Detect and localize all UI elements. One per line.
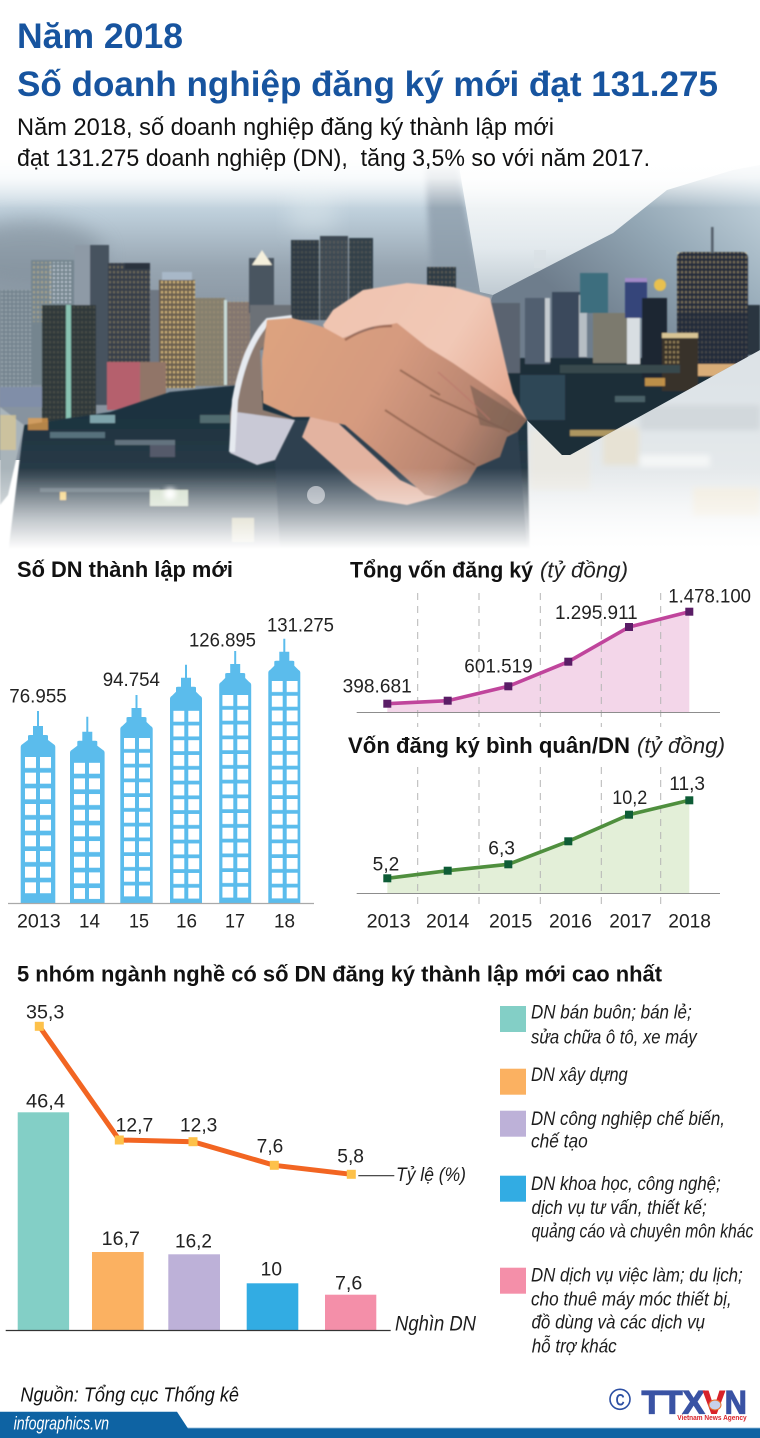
photo: lower hand and wrist <box>262 318 527 497</box>
value labels: capital: 1.478.100 <box>668 587 751 608</box>
tower year labels: 14 <box>79 912 100 933</box>
value labels: share: 35,3 <box>26 1002 64 1023</box>
windows 2014 <box>74 763 100 899</box>
tower 2015 <box>120 695 153 903</box>
value labels: capital: 398.681 <box>343 677 412 698</box>
label: bar series: Nghìn DN <box>395 1313 477 1336</box>
legend item: construction <box>500 1065 628 1095</box>
heading: average capital per enterprise: (tỷ đồng) <box>637 733 725 758</box>
value labels: average capital: 11,3 <box>669 774 705 795</box>
bars: thousand enterprises <box>18 1112 376 1330</box>
windows 2017 <box>222 695 248 898</box>
markers: share points <box>35 1022 356 1179</box>
intro text block: Năm 2018, số doanh nghiệp đăng ký thành lập mới <box>17 114 554 141</box>
title: Số doanh nghiệp đăng ký mới đạt 131.275 <box>17 65 718 104</box>
tower 2017 <box>219 651 251 903</box>
legend item: employment and tourism services <box>500 1266 743 1358</box>
value labels: bars: 46,4 <box>26 1092 65 1113</box>
heading: top 5 industry groups: 5 nhóm ngành nghề có số DN đăng ký thành lập mới cao nhất <box>17 962 663 987</box>
chart: skyscraper bars of new enterprises <box>8 616 334 933</box>
legend item: manufacturing: DN công nghiệp chế biến, <box>531 1109 725 1130</box>
tower 2014 <box>70 717 105 903</box>
photo: suit and sky backdrop <box>0 168 760 518</box>
footer banner <box>0 1412 760 1438</box>
photo: upper palm and thumb <box>323 283 527 432</box>
photo: right arm sleeve with skyline <box>480 160 760 460</box>
wordmark: N <box>725 1384 747 1420</box>
area chart: total registered capital <box>343 587 751 727</box>
photo: shirt cuff <box>230 317 295 465</box>
legend item: science and technology: DN khoa học, công nghệ; <box>531 1174 721 1195</box>
value labels: average capital: 5,2 <box>373 855 399 876</box>
tower year labels: 16 <box>176 912 197 933</box>
legend item: employment and tourism services: cho thuê máy móc thiết bị, <box>531 1290 732 1311</box>
heading: average capital per enterprise: Vốn đăng ký bình quân/DN <box>348 733 630 758</box>
year labels: 2015 <box>489 912 532 933</box>
footer site name: infographics.vn <box>14 1413 109 1433</box>
legend item: wholesale and retail: DN bán buôn; bán lẻ; <box>531 1002 692 1023</box>
tower value labels: 76.955 <box>9 687 67 708</box>
value labels: share <box>26 1002 364 1168</box>
year labels: 2013 <box>367 912 411 933</box>
value labels: average capital: 6,3 <box>488 838 515 859</box>
photo: clasped hands <box>262 283 527 505</box>
wordmark: TTX <box>642 1384 705 1420</box>
markers: capital points <box>383 608 693 708</box>
tower value labels: 94.754 <box>103 670 160 691</box>
line: average capital trend <box>387 800 689 878</box>
year labels: 2016 <box>549 912 592 933</box>
value labels: capital: 1.295.911 <box>555 603 638 624</box>
copyright symbol: C <box>616 1390 625 1410</box>
tower year labels: 2013 <box>17 912 61 933</box>
photo: jacket button <box>307 486 325 504</box>
wordmark: V <box>703 1384 726 1420</box>
year labels: 2018 <box>668 912 711 933</box>
value labels: bars: 16,2 <box>175 1231 212 1252</box>
value labels: capital: 601.519 <box>464 657 533 678</box>
source note: Nguồn: Tổng cục Thống kê <box>20 1385 239 1407</box>
tower year labels: 17 <box>225 912 245 933</box>
tower 2013 <box>21 711 55 903</box>
tower year labels: 18 <box>274 912 295 933</box>
value labels: share: 12,7 <box>116 1116 153 1137</box>
logo: TTXVN <box>610 1384 747 1422</box>
value labels: bars: 7,6 <box>335 1273 362 1294</box>
legend item: employment and tourism services: hỗ trợ khác <box>532 1337 617 1358</box>
tower value labels: 126.895 <box>189 631 256 652</box>
photo: handshake over city skyline <box>0 158 760 570</box>
photo: bottom fade <box>0 468 760 558</box>
combo chart: industry groups <box>6 1002 477 1336</box>
heading: total registered capital: (tỷ đồng) <box>540 558 628 583</box>
value labels: bars <box>26 1092 362 1294</box>
photo: suit lower dark region behind hands <box>276 420 525 534</box>
heading: total registered capital: Tổng vốn đăng ký <box>350 558 534 583</box>
value labels: share: 12,3 <box>180 1116 217 1137</box>
legend item: manufacturing <box>500 1109 725 1153</box>
line: share percent <box>39 1026 351 1174</box>
legend item: manufacturing: chế tạo <box>531 1132 588 1153</box>
line: capital trend <box>387 612 689 704</box>
value labels: capital <box>343 587 751 698</box>
tower year labels <box>17 912 295 933</box>
heading: total registered capital <box>350 558 628 583</box>
value labels: average capital: 10,2 <box>612 788 647 809</box>
legend item: wholesale and retail <box>500 1002 698 1048</box>
legend item: construction: DN xây dựng <box>531 1065 628 1086</box>
intro text block: đạt 131.275 doanh nghiệp (DN), tăng 3,5% so với năm 2017. <box>17 145 650 172</box>
value labels: bars: 16,7 <box>102 1229 140 1250</box>
photo: top fade <box>0 158 760 208</box>
value labels: share: 7,6 <box>257 1136 283 1157</box>
year labels: 2017 <box>609 912 652 933</box>
year labels: 2014 <box>426 912 470 933</box>
photo: under fingers <box>302 417 437 505</box>
title <box>17 17 718 104</box>
legend item: wholesale and retail: sửa chữa ô tô, xe máy <box>531 1027 698 1048</box>
intro text block <box>17 114 650 172</box>
area chart: average capital per enterprise <box>357 767 720 933</box>
tower value labels <box>9 616 334 708</box>
value labels: average capital <box>373 774 705 876</box>
photo: skyline buildings left <box>0 236 456 425</box>
tower value labels: 131.275 <box>267 616 334 637</box>
legend: industry groups <box>500 1002 754 1358</box>
windows 2013 <box>25 757 51 893</box>
value labels: bars: 10 <box>261 1260 282 1281</box>
windows 2015 <box>124 738 150 896</box>
legend item: science and technology: dịch vụ tư vấn, thiết kế; <box>532 1198 707 1219</box>
windows 2016 <box>173 711 199 899</box>
wordmark <box>642 1384 747 1420</box>
tower year labels: 15 <box>129 912 149 933</box>
legend item: employment and tourism services: đồ dùng và các dịch vụ <box>532 1312 705 1333</box>
tower 2018 <box>268 639 300 903</box>
label: share series: Tỷ lệ (%) <box>396 1165 466 1186</box>
title: Năm 2018 <box>17 17 183 56</box>
photo: city light glow <box>164 488 176 500</box>
tower 2016 <box>170 665 202 903</box>
windows 2018 <box>272 681 298 898</box>
year labels <box>367 912 711 933</box>
legend item: science and technology <box>500 1174 754 1242</box>
heading: new enterprises: Số DN thành lập mới <box>17 557 233 582</box>
tagline: Vietnam News Agency <box>677 1415 747 1422</box>
photo: dark lower city left <box>0 384 530 545</box>
value labels: share: 5,8 <box>337 1147 364 1168</box>
markers: average capital points <box>383 796 693 882</box>
